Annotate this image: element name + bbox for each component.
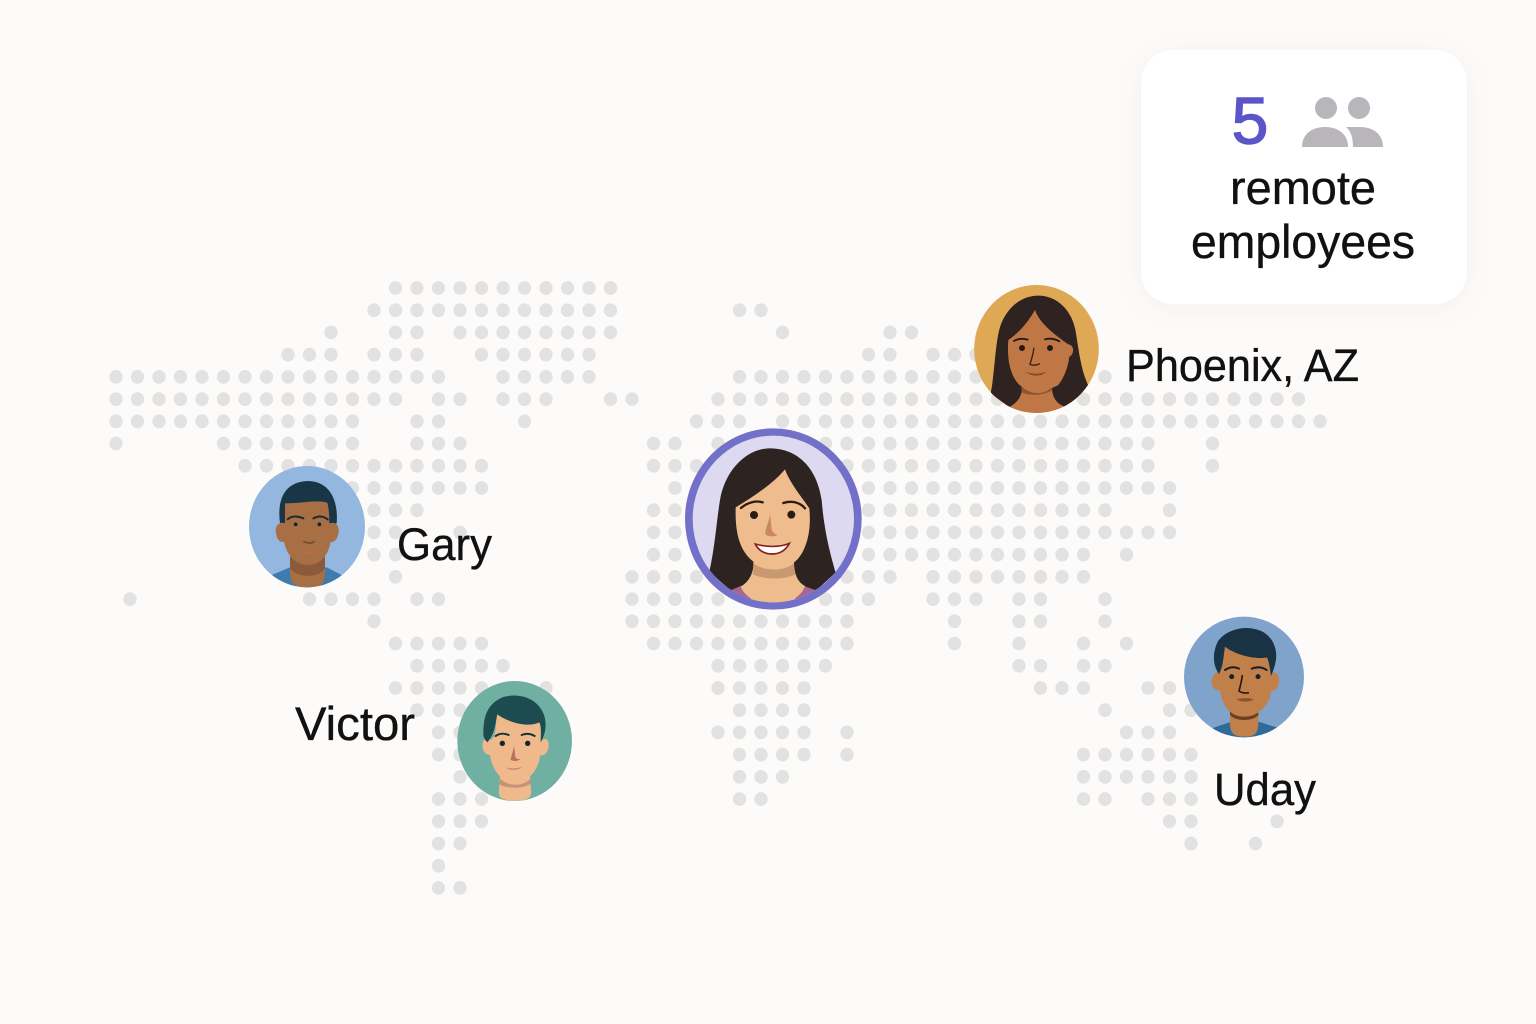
label: Uday: Uday	[1214, 764, 1316, 815]
stat card: 5 remote employees	[1141, 50, 1467, 304]
label: Phoenix, AZ: Phoenix, AZ	[1126, 340, 1359, 391]
avatar: Uday	[1184, 617, 1304, 743]
avatar: Victor	[457, 681, 572, 801]
label: Gary: Gary	[397, 519, 492, 570]
avatar: Phoenix, AZ woman	[974, 285, 1099, 416]
label: remote employees	[1191, 161, 1415, 268]
label: remote employees: employees	[1191, 215, 1415, 268]
dotted world map	[116, 288, 1320, 888]
number: 5: 5	[1232, 84, 1268, 158]
label: Victor: Victor	[295, 697, 415, 750]
avatar: center woman	[685, 428, 862, 610]
icon: people	[1302, 97, 1383, 147]
avatar: Gary	[249, 466, 365, 593]
label: remote employees: remote	[1230, 161, 1376, 214]
